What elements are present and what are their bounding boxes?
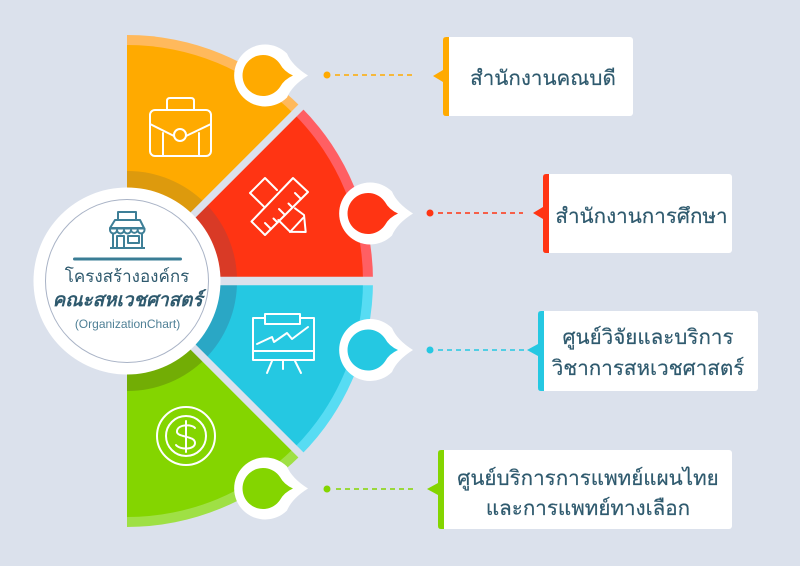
- connector: orange dashed line: [324, 72, 416, 78]
- panel: teal sector: [127, 281, 373, 455]
- marker: teal speech bubble: [339, 319, 413, 381]
- connector: green dashed line: [324, 486, 416, 492]
- connector: teal dashed line: [426, 346, 524, 354]
- card: thai and alternative medicine service center: [427, 450, 732, 529]
- icon: ruler and pencil: [250, 178, 308, 235]
- panel: green sector: [127, 281, 301, 527]
- card: office of the dean: สำนักงานคณบดี: [470, 67, 616, 90]
- card: research and academic service center: ศูนย์วิจัยและบริการ: [562, 326, 734, 350]
- icon: dollar coin: [157, 407, 215, 465]
- heading: organization structure: โครงสร้างองค์กร: [65, 266, 189, 286]
- card: thai and alternative medicine service center: ศูนย์บริการการแพทย์แผนไทย: [457, 466, 719, 491]
- card: office of academic affairs: [533, 174, 732, 253]
- card: research and academic service center: [527, 311, 758, 391]
- connector: red dashed line: [426, 210, 523, 216]
- marker: orange speech bubble: [234, 44, 308, 106]
- marker: green speech bubble: [234, 458, 308, 520]
- panel: orange sector: [127, 35, 301, 281]
- card: thai and alternative medicine service center: และการแพทย์ทางเลือก: [486, 497, 690, 520]
- icon: store: [110, 212, 145, 248]
- marker: red speech bubble: [339, 182, 413, 244]
- icon: presentation board with chart: [253, 314, 314, 373]
- center circle badge: [34, 188, 220, 374]
- card: office of academic affairs: สำนักงานการศึกษา: [555, 205, 728, 228]
- caption: OrganizationChart: (OrganizationChart): [75, 317, 180, 331]
- card: office of the dean: [433, 37, 633, 116]
- heading: faculty name: คณะสหเวชศาสตร์: [53, 289, 207, 310]
- icon: briefcase: [150, 98, 211, 156]
- card: research and academic service center: วิชาการสหเวชศาสตร์: [551, 357, 744, 380]
- panel: red sector: [127, 107, 373, 281]
